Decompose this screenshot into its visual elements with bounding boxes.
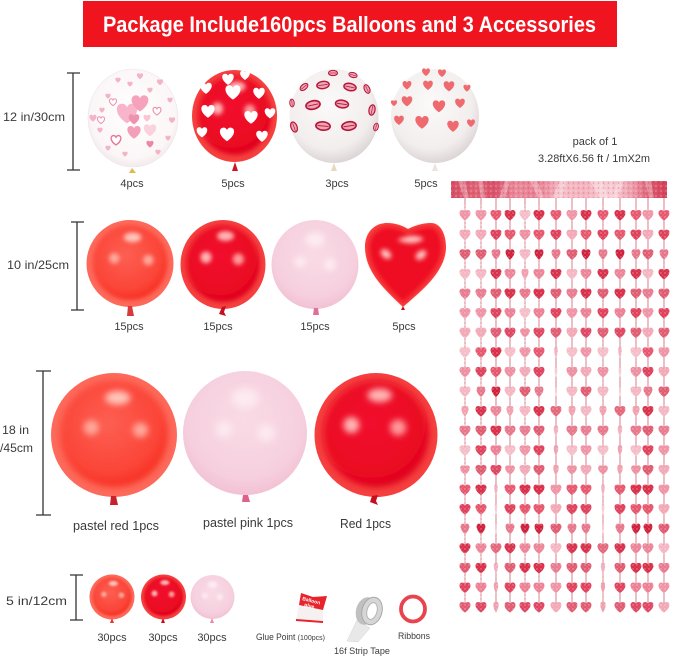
balloon: red with white hearts <box>192 70 277 171</box>
label: pastel red 1pcs: pastel red 1pcs <box>73 519 159 533</box>
balloon: pastel red 10 in <box>86 220 174 316</box>
curtain header <box>451 181 667 198</box>
label: 5pcs: 5pcs <box>221 178 245 190</box>
row labels: 5 in quantities: 30pcs <box>148 632 178 644</box>
size ruler: 10 in <box>7 222 84 310</box>
balloon: white with red hearts <box>391 68 479 171</box>
row labels: 5 in quantities: 30pcs <box>97 632 127 644</box>
row labels: 10 in quantities: 5pcs <box>392 321 416 333</box>
icon: strip tape roll <box>347 595 385 642</box>
label: 3pcs: 3pcs <box>325 178 349 190</box>
size ruler: 18 in: 18 in <box>2 423 29 437</box>
label: strip tape: 16f Strip Tape <box>334 646 390 657</box>
size ruler: 5 in: 5 in/12cm <box>6 594 67 608</box>
balloon: pastel red 18 in <box>51 373 177 505</box>
balloon: clear with pink hearts <box>88 69 178 173</box>
size ruler: 18 in: /45cm <box>0 441 33 455</box>
row labels: 5 in quantities: 30pcs <box>197 632 227 644</box>
curtain glitter overlay <box>455 205 671 617</box>
icon: glue point packet <box>296 593 327 623</box>
size ruler: 10 in: 10 in/25cm <box>7 258 69 272</box>
label: glue point: Glue Point (100pcs) <box>256 632 325 642</box>
icon: ribbon roll <box>401 596 425 622</box>
label: 5pcs: 5pcs <box>414 178 438 190</box>
icon: glue point packet: glue <box>304 602 315 610</box>
heart foil curtain <box>451 181 671 617</box>
curtain hearts <box>460 210 669 613</box>
row labels: 5 in quantities <box>97 632 227 644</box>
icon: glue point packet: Balloon <box>302 596 321 606</box>
size ruler: 12 in: 12 in/30cm <box>3 110 65 124</box>
balloon: red 5 in <box>141 574 186 623</box>
label: Red 1pcs: Red 1pcs <box>340 517 391 531</box>
curtain strands <box>465 198 664 610</box>
row labels: 10 in quantities <box>114 321 416 333</box>
balloon: red 18 in <box>314 373 438 505</box>
label: curtain pack size <box>538 136 650 165</box>
balloon: red 10 in <box>180 220 266 316</box>
balloon: pastel red 5 in <box>90 574 134 623</box>
row labels: 10 in quantities: 15pcs <box>203 321 233 333</box>
label: ribbons: Ribbons <box>398 631 430 642</box>
size ruler: 5 in <box>6 575 83 620</box>
title banner: Package Include160pcs Balloons and 3 Accessories <box>103 12 596 37</box>
balloon: pastel pink 5 in <box>190 575 234 623</box>
row labels: 10 in quantities: 15pcs <box>114 321 144 333</box>
label: curtain pack size: 3.28ftX6.56 ft / 1mX2m <box>538 153 650 165</box>
size ruler: 12 in <box>3 73 80 170</box>
size ruler: 18 in <box>0 371 51 515</box>
row labels: 10 in quantities: 15pcs <box>300 321 330 333</box>
title banner <box>83 1 617 47</box>
balloon: pastel pink 10 in <box>272 220 358 315</box>
balloon: pastel pink 18 in <box>183 371 307 502</box>
label: 4pcs: 4pcs <box>120 178 144 190</box>
balloon: red heart shape <box>365 223 446 310</box>
label: curtain pack size: pack of 1 <box>573 136 617 148</box>
label: pastel pink 1pcs: pastel pink 1pcs <box>203 516 293 530</box>
balloon: white with lip prints <box>289 69 379 171</box>
